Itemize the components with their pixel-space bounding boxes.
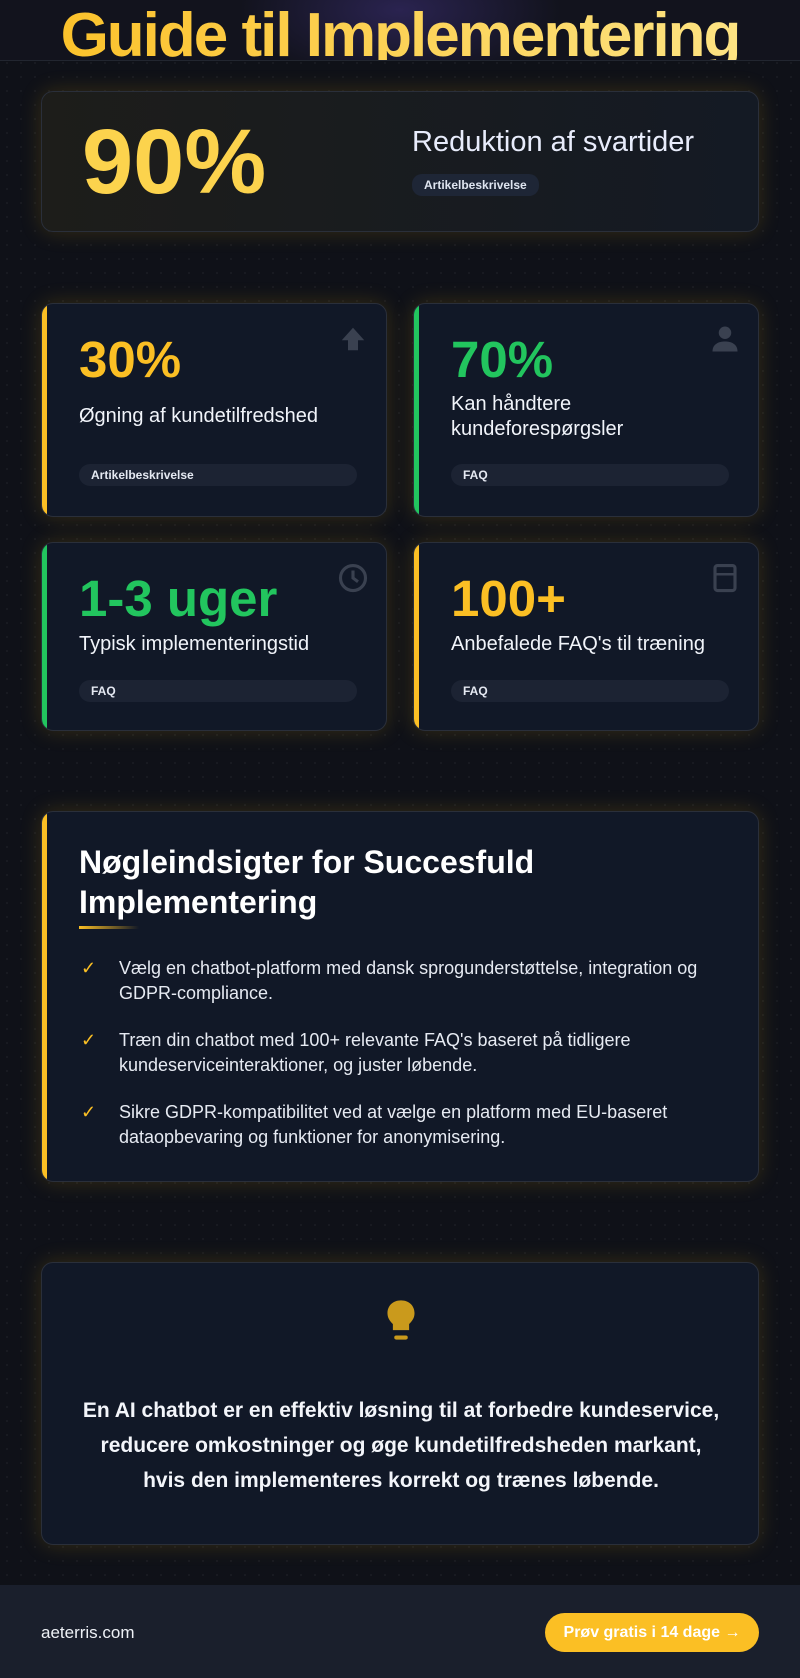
tag xyxy=(451,464,729,486)
insights heading xyxy=(79,844,534,920)
icon: clock xyxy=(339,564,367,592)
icon: lightbulb xyxy=(387,1300,414,1340)
number: 1-3 uger xyxy=(79,570,277,627)
insights heading: Implementering xyxy=(79,884,317,920)
stat card: 70% xyxy=(413,303,759,517)
label: Typisk implementeringstid xyxy=(79,633,309,655)
number: 100+ xyxy=(451,570,566,627)
cta button: Prøv gratis i 14 dage → xyxy=(564,1624,740,1641)
icon: calculator xyxy=(714,564,736,592)
insight 2: Træn din chatbot med 100+ relevante FAQ's baseret på tidligere kundeserviceinteraktioner, og juster løbende. xyxy=(119,1030,631,1075)
conclusion text xyxy=(83,1399,719,1492)
tag: FAQ xyxy=(463,684,488,698)
header xyxy=(0,0,800,61)
stat card: 1-3 uger xyxy=(41,542,387,731)
hero tag xyxy=(412,174,539,196)
label: Øgning af kundetilfredshed xyxy=(79,405,318,427)
hero label: Reduktion af svartider xyxy=(412,126,694,158)
insights heading: Nøgleindsigter for Succesfuld xyxy=(79,844,534,880)
tag: FAQ xyxy=(463,468,488,482)
label xyxy=(451,393,623,440)
tag: FAQ xyxy=(91,684,116,698)
panel: key insights xyxy=(41,811,759,1182)
cta button xyxy=(545,1613,759,1652)
number: 70% xyxy=(451,331,553,388)
icon: person xyxy=(712,326,738,352)
stat card: 100+ xyxy=(413,542,759,731)
hero tag: Artikelbeskrivelse xyxy=(424,178,527,192)
tag xyxy=(79,464,357,486)
insight 1: ✓ xyxy=(81,958,96,978)
conclusion text: hvis den implementeres korrekt og trænes løbende. xyxy=(143,1469,659,1492)
insight 2: ✓ xyxy=(81,1030,96,1050)
insight 1: Vælg en chatbot-platform med dansk sprogunderstøttelse, integration og GDPR-compliance. xyxy=(119,958,697,1003)
tag: Artikelbeskrivelse xyxy=(91,468,194,482)
insight 3: ✓ xyxy=(81,1102,96,1122)
conclusion text: En AI chatbot er en effektiv løsning til at forbedre kundeservice, xyxy=(83,1399,719,1422)
label: Kan håndtere xyxy=(451,393,571,415)
hero number: 90% xyxy=(82,111,266,213)
conclusion text: reducere omkostninger og øge kundetilfredsheden markant, xyxy=(101,1434,701,1457)
panel: conclusion xyxy=(41,1262,759,1545)
label: Anbefalede FAQ's til træning xyxy=(451,633,705,655)
stat card: 30% xyxy=(41,303,387,517)
label: kundeforespørgsler xyxy=(451,418,623,440)
number: 30% xyxy=(79,331,181,388)
insight 3: Sikre GDPR-kompatibilitet ved at vælge en platform med EU-baseret dataopbevaring og funktioner for anonymisering. xyxy=(119,1102,667,1147)
heading underline xyxy=(79,926,139,929)
hero stat card xyxy=(41,91,759,232)
footer xyxy=(0,1585,800,1678)
footer site: aeterris.com xyxy=(41,1623,135,1642)
icon: arrow up xyxy=(342,328,364,350)
tag xyxy=(451,680,729,702)
tag xyxy=(79,680,357,702)
insight list xyxy=(81,958,697,1147)
